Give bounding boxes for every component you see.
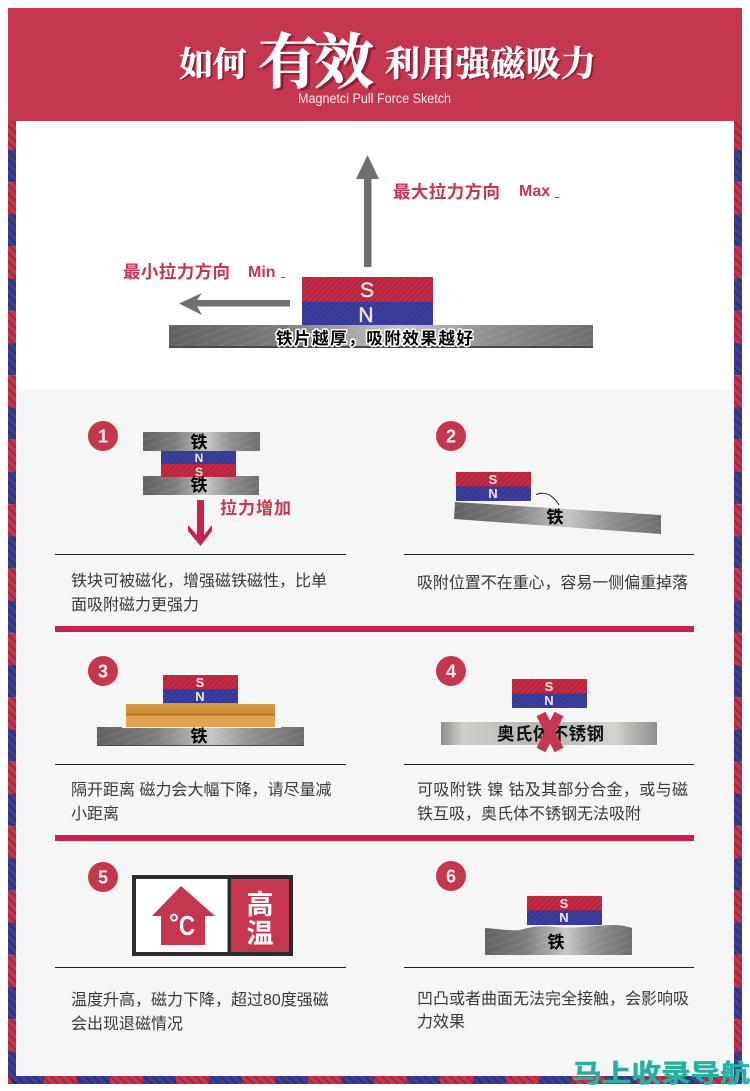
title: 如何 (179, 46, 247, 84)
text: tip 4 (417, 781, 688, 823)
diagram: austenitic stainless steel does not attract: S (545, 679, 554, 694)
diagram: uneven surface: 铁 (548, 933, 564, 952)
text: tip 2: 吸附位置不在重心，容易一侧偏重掉落 (417, 574, 688, 592)
text: tip 3: 小距离 (71, 805, 119, 823)
label: minimum pull direction (123, 262, 285, 282)
tip 2 (417, 421, 688, 592)
text: tip 6: 凹凸或者曲面无法完全接触，会影响吸 (417, 990, 689, 1008)
text: tip 1 (71, 572, 327, 614)
diagram: magnet between two iron plates: 铁 (190, 433, 208, 452)
label: maximum pull direction (393, 182, 559, 202)
diagram: magnet between two iron plates: S (195, 465, 203, 479)
tip 4 (417, 656, 688, 823)
title: 有效 (258, 30, 374, 96)
diagram: uneven surface (485, 896, 632, 955)
text: tip 6 (417, 990, 689, 1031)
diagram: uneven surface: N (559, 910, 569, 925)
subtitle: Magnetci Pull Force Sketch (298, 91, 451, 106)
steel plate with caption (169, 325, 593, 348)
diagram: magnet off-centre on tilted plate: 铁 (546, 508, 564, 527)
text: tip 5: 会出现退磁情况 (71, 1015, 183, 1033)
text: tip 4: 可吸附铁 镍 钴及其部分合金，或与磁 (417, 781, 688, 799)
diagram: wood between magnet and iron: S (196, 675, 205, 690)
text: tip 5 (71, 991, 329, 1033)
label: maximum pull direction: 最大拉力方向 (393, 182, 500, 202)
tip 6 (417, 861, 689, 1031)
diagram: magnet off-centre on tilted plate: S (489, 472, 498, 487)
text: tip 6: 力效果 (417, 1013, 465, 1031)
diagram: wood between magnet and iron: 铁 (190, 727, 208, 746)
icon: high temperature: C (179, 910, 195, 941)
title: 有效 (261, 32, 377, 98)
label: maximum pull direction: Max (519, 183, 550, 200)
number badge 5: 5 (98, 868, 108, 888)
tip 3 (71, 656, 331, 823)
text: tip 1: 铁块可被磁化，增强磁铁磁性，比单 (71, 572, 327, 590)
icon: high temperature (132, 875, 293, 956)
label: increased pull: 拉力增加 (220, 498, 291, 518)
arrow: increased pull (188, 500, 212, 546)
panel: header (8, 8, 742, 121)
label: minimum pull direction: 最小拉力方向 (123, 262, 230, 282)
diagram: wood between magnet and iron (97, 675, 304, 746)
title (179, 30, 598, 98)
title: 利用强磁吸力 (387, 46, 598, 85)
watermark: 马上收录导航 (572, 1060, 750, 1088)
number badge 3 (88, 656, 118, 686)
text: tip 5: 温度升高，磁力下降，超过80度强磁 (71, 991, 329, 1009)
diagram: magnet between two iron plates: 铁 (190, 476, 208, 495)
number badge 3: 3 (98, 662, 108, 682)
panel: pull direction diagram (16, 121, 734, 389)
diagram: austenitic stainless steel does not attract: N (544, 693, 554, 708)
magnet: large (302, 277, 433, 327)
text: tip 1: 面吸附磁力更强力 (71, 596, 199, 614)
tip 5 (71, 862, 329, 1033)
diagram: magnet off-centre on tilted plate: N (488, 486, 498, 501)
steel plate with caption: 铁片越厚，吸附效果越好 (276, 329, 473, 348)
magnet: large: S (360, 279, 374, 302)
number badge 6 (436, 861, 466, 891)
number badge 2 (436, 421, 466, 451)
label: minimum pull direction: Min (248, 264, 276, 281)
text: tip 3: 隔开距离 磁力会大幅下降，请尽量减 (71, 781, 331, 799)
title: 利用强磁吸力 (385, 45, 596, 84)
diagram: austenitic stainless steel does not attract: 奥氏体不锈钢 (497, 724, 604, 744)
number badge 4 (436, 656, 466, 686)
title: 如何 (181, 47, 249, 85)
magnet: large: N (358, 304, 374, 327)
diagram: uneven surface: S (560, 896, 569, 911)
arrow: maximum pull upward (356, 155, 379, 267)
number badge 2: 2 (446, 426, 456, 446)
diagram: wood between magnet and iron: N (195, 689, 205, 704)
panel: tips (16, 389, 734, 1076)
text: tip 3 (71, 781, 331, 823)
text: tip 4: 铁互吸，奥氏体不锈钢无法吸附 (417, 805, 641, 823)
diagram: magnet between two iron plates (143, 432, 260, 495)
diagram: austenitic stainless steel does not attract (441, 679, 657, 750)
icon: high temperature: 温 (246, 919, 274, 949)
tip 1 (71, 421, 327, 614)
number badge 1 (88, 421, 118, 451)
number badge 6: 6 (446, 866, 456, 886)
number badge 4: 4 (446, 662, 456, 682)
icon: high temperature: 高 (246, 890, 274, 920)
number badge 1: 1 (98, 426, 108, 446)
arrow: minimum pull sideways (179, 293, 290, 315)
diagram: magnet between two iron plates: N (195, 451, 203, 465)
number badge 5 (88, 862, 118, 892)
diagram: magnet off-centre on tilted plate (454, 472, 661, 534)
icon: high temperature: ° (169, 909, 179, 937)
